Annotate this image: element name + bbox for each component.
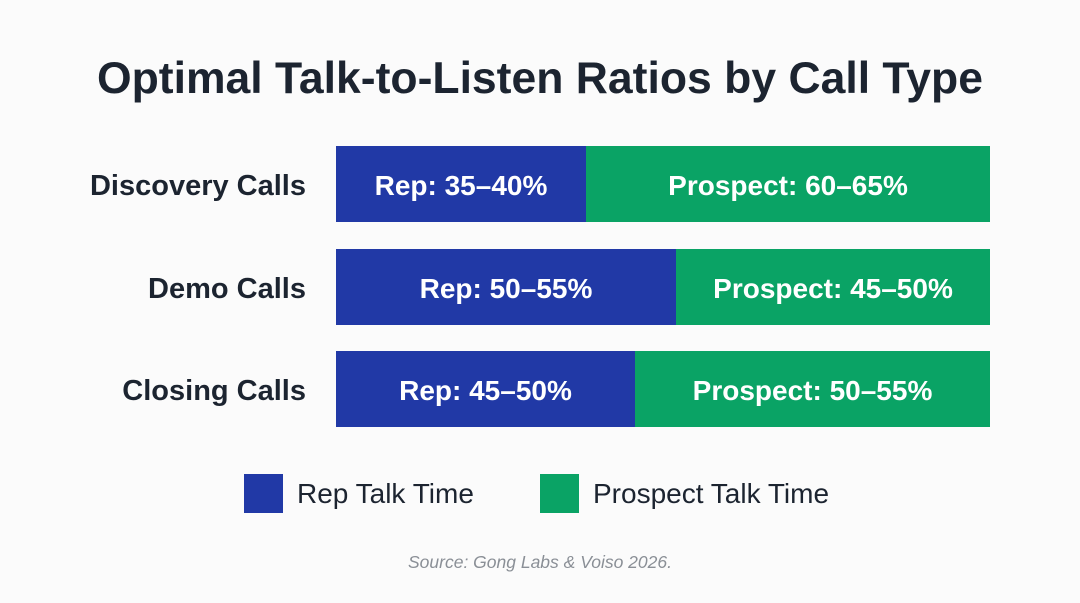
bar: closing: Rep: 45–50% [399,374,572,406]
legend text: rep: Rep Talk Time [297,478,474,509]
label: demo: Demo Calls [148,273,306,305]
bar: discovery [336,146,990,222]
bar: closing [336,351,990,427]
label: discovery: Discovery Calls [90,170,306,202]
bar: demo [336,249,990,325]
label: closing: Closing Calls [122,375,306,407]
legend swatch: prospect [540,474,579,513]
bar: discovery: Rep: 35–40% [375,170,547,200]
bar: discovery: Prospect: 60–65% [668,170,908,200]
bar: demo: Rep: 50–55% [420,272,592,304]
source: Source: Gong Labs & Voiso 2026. [408,552,672,572]
legend text: prospect: Prospect Talk Time [593,478,829,509]
bar: demo: Prospect: 45–50% [713,272,953,304]
title: Optimal Talk-to-Listen Ratios by Call Type [97,54,983,103]
legend swatch: rep [244,474,283,513]
bar: closing: Prospect: 50–55% [693,374,932,406]
